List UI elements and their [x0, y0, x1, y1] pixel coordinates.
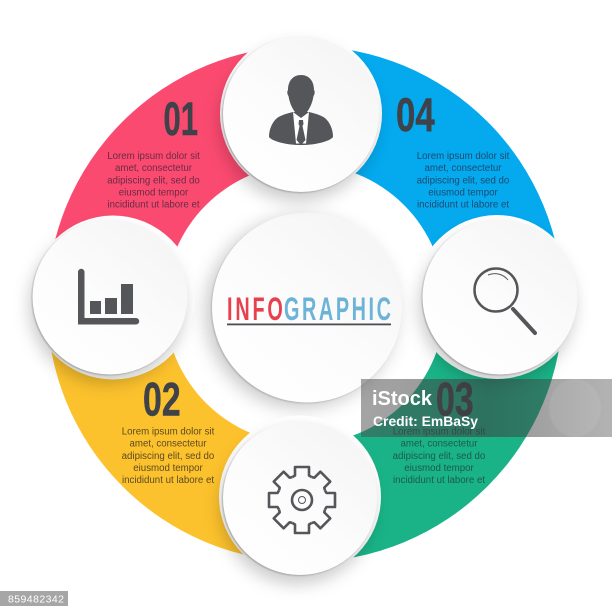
description 03: adipiscing elit, sed do	[393, 451, 485, 462]
halo	[415, 215, 579, 379]
description 01: Lorem ipsum dolor sit	[107, 151, 200, 162]
title part: INFO: INFO	[227, 291, 283, 327]
disc	[422, 220, 578, 374]
description 01: incididunt ut labore et	[107, 200, 200, 210]
description 04: eiusmod tempor	[428, 188, 498, 198]
band	[361, 379, 612, 437]
number 03: 03	[436, 373, 474, 426]
icon: businessman	[269, 75, 333, 145]
description 03: Lorem ipsum dolor sit	[393, 426, 486, 438]
description 02: Lorem ipsum dolor sit	[122, 426, 215, 438]
text block 02	[122, 373, 215, 486]
description 01: adipiscing elit, sed do	[107, 176, 200, 186]
description 01: eiusmod tempor	[119, 188, 189, 198]
segment: green 03	[305, 304, 563, 562]
iStock logo: iStock	[372, 388, 433, 410]
segment: blue 04	[305, 46, 563, 304]
disc	[32, 220, 188, 374]
description 03: incididunt ut labore et	[393, 475, 485, 486]
band highlight	[549, 379, 601, 437]
image id tag	[0, 591, 68, 606]
halo	[220, 32, 382, 194]
description 04: incididunt ut labore et	[417, 200, 509, 210]
node: person	[220, 32, 382, 194]
center disc	[212, 212, 402, 402]
disc	[223, 36, 379, 192]
halo	[31, 216, 195, 380]
segment: pink 01	[47, 46, 305, 304]
description 04: adipiscing elit, sed do	[417, 176, 509, 186]
icon: magnifier	[474, 268, 535, 333]
watermark band	[361, 379, 612, 437]
halo	[219, 416, 381, 578]
node: magnifier	[415, 215, 579, 379]
number 04: 04	[396, 89, 435, 141]
tag number: 859482342	[8, 594, 64, 606]
description 04: amet, consectetur	[424, 163, 502, 174]
icon: bar chart	[78, 269, 139, 324]
node: chart	[31, 216, 195, 380]
segment: yellow 02	[47, 304, 305, 562]
description 03: amet, consectetur	[400, 438, 478, 450]
credit: Credit: EmBaSy	[373, 413, 478, 429]
title part: GRAPHIC: GRAPHIC	[284, 291, 391, 327]
tag background	[0, 591, 68, 606]
center disc with title	[212, 212, 402, 402]
description 02: eiusmod tempor	[133, 463, 203, 474]
description 04: Lorem ipsum dolor sit	[417, 151, 510, 162]
description 02: incididunt ut labore et	[122, 475, 214, 486]
text block 01	[107, 94, 200, 210]
description 03: eiusmod tempor	[404, 463, 474, 474]
number 02: 02	[143, 373, 181, 426]
text block 03	[393, 373, 486, 486]
description 02: amet, consectetur	[130, 438, 207, 450]
node: gear	[219, 416, 381, 578]
description 01: amet, consectetur	[115, 163, 193, 174]
description 02: adipiscing elit, sed do	[122, 451, 214, 462]
disc	[223, 421, 377, 575]
text block 04	[396, 89, 510, 210]
icon: gear	[269, 467, 335, 533]
number 01: 01	[164, 94, 198, 146]
title underline	[227, 324, 391, 325]
